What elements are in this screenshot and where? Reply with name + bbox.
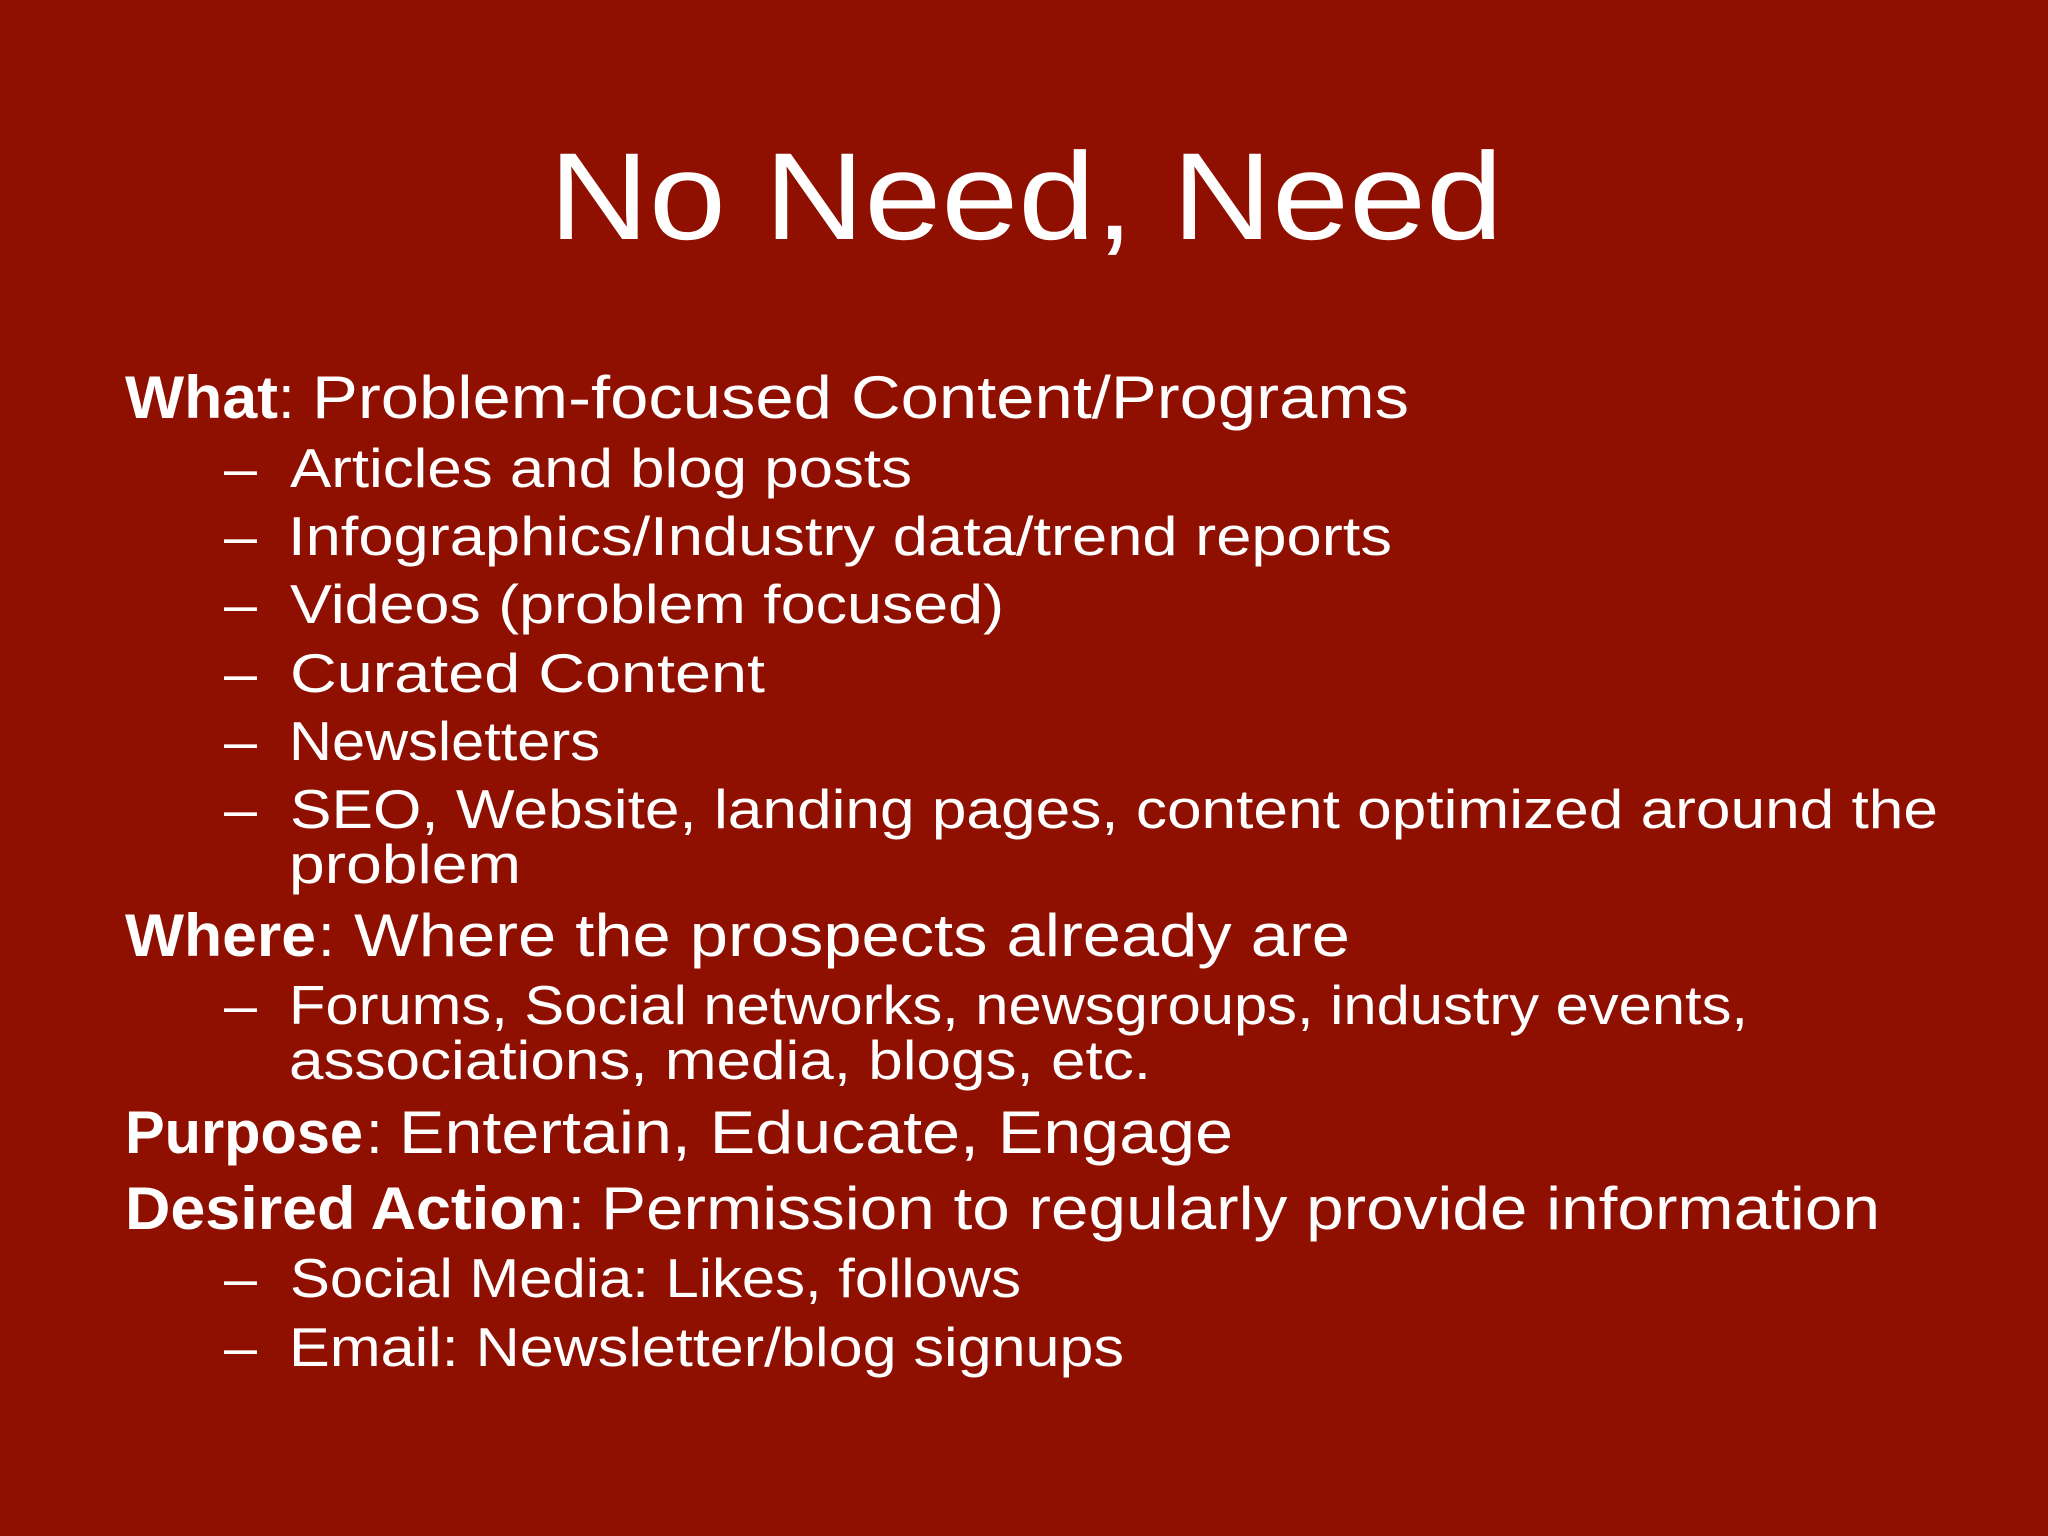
list: what items: – xyxy=(224,710,257,772)
section: desired action: : xyxy=(568,1175,585,1242)
list: where items: associations, media, blogs, etc. xyxy=(289,1029,1151,1091)
section: what: : xyxy=(278,364,295,431)
section: what: Problem-focused Content/Programs xyxy=(312,364,1409,431)
section: purpose: : xyxy=(366,1099,383,1166)
list: desired action items: Email: Newsletter/blog signups xyxy=(289,1316,1124,1378)
list: what items: Newsletters xyxy=(289,710,600,772)
section: where: : xyxy=(318,902,335,969)
list: where items: – xyxy=(224,974,257,1036)
section: purpose xyxy=(125,1099,1233,1166)
section: what: What xyxy=(125,364,278,431)
list: what items: SEO, Website, landing pages, content optimized around the xyxy=(290,778,1938,840)
list: what items: Infographics/Industry data/trend reports xyxy=(288,505,1392,567)
section: desired action xyxy=(125,1175,1880,1242)
section: purpose: Entertain, Educate, Engage xyxy=(399,1099,1233,1166)
title: No Need, Need xyxy=(549,128,1503,266)
list: what items: problem xyxy=(289,833,521,895)
section: where: Where xyxy=(125,902,316,969)
section: desired action: Permission to regularly provide information xyxy=(601,1175,1880,1242)
list: what items xyxy=(224,437,1938,895)
list: what items: Videos (problem focused) xyxy=(290,573,1004,635)
list: what items: – xyxy=(224,437,257,499)
list: what items: – xyxy=(224,505,257,567)
list: what items: Curated Content xyxy=(290,642,765,704)
list: what items: – xyxy=(224,778,257,840)
list: where items xyxy=(224,974,1748,1091)
list: what items: – xyxy=(224,573,257,635)
list: desired action items: Social Media: Likes, follows xyxy=(290,1247,1021,1309)
section: desired action: Desired Action xyxy=(125,1175,566,1242)
list: desired action items: – xyxy=(224,1247,257,1309)
list: where items: Forums, Social networks, newsgroups, industry events, xyxy=(289,974,1748,1036)
section: purpose: Purpose xyxy=(125,1099,363,1166)
section: where: Where the prospects already are xyxy=(354,902,1350,969)
list: desired action items: – xyxy=(224,1316,257,1378)
list: desired action items xyxy=(224,1247,1124,1378)
list: what items: – xyxy=(224,642,257,704)
list: what items: Articles and blog posts xyxy=(290,437,912,499)
